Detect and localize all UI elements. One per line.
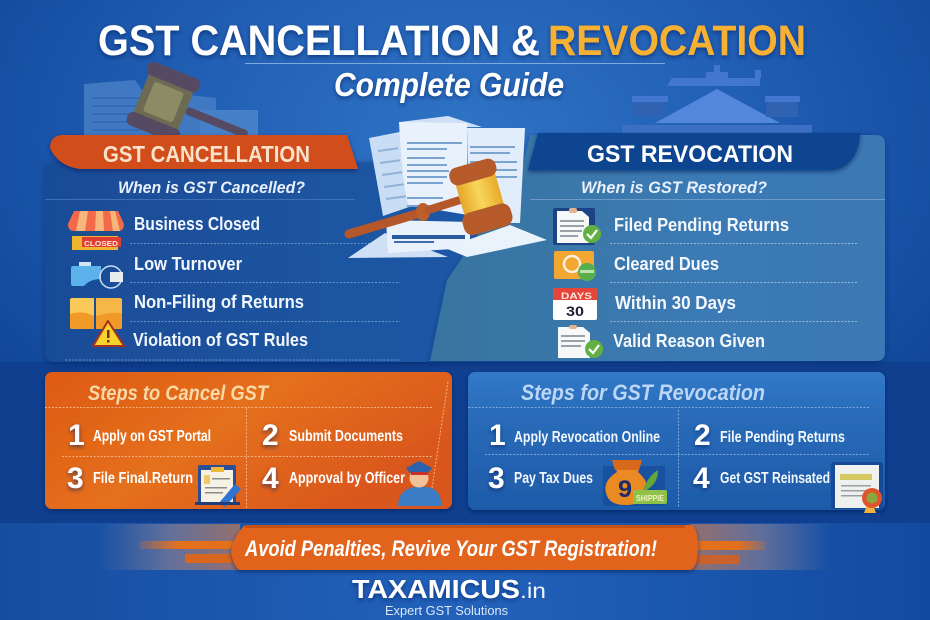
icon: calendar 30 days — [553, 288, 597, 320]
step 4 — [693, 462, 830, 495]
icon: filed returns — [553, 208, 601, 245]
title — [98, 17, 806, 65]
faded documents and gavel — [84, 60, 260, 167]
icon: money bag: 9 — [618, 476, 632, 503]
row: within 30 days: Within 30 Days — [615, 293, 736, 313]
banner: call to action: Avoid Penalties, Revive Your GST Registration! — [244, 536, 657, 561]
ribbon: GST revocation: GST REVOCATION — [587, 141, 793, 168]
step 3 — [488, 462, 593, 495]
icon: clipboard and pen — [195, 465, 241, 507]
step 1: 1 — [489, 419, 506, 452]
panel: GST cancellation — [45, 135, 530, 362]
logo: Taxamicus: .in — [520, 580, 546, 603]
logo: Taxamicus: TAXAMICUS — [352, 574, 520, 604]
icon: officer — [398, 461, 441, 506]
row: non-filing: Non-Filing of Returns — [134, 292, 304, 312]
ribbon: GST revocation — [528, 133, 860, 170]
row: filed returns: Filed Pending Returns — [614, 215, 789, 235]
icon: calendar 30 days: DAYS — [561, 291, 592, 301]
heading: steps to cancel: Steps to Cancel GST — [88, 382, 270, 405]
step 2: 2 — [262, 419, 279, 452]
icon: money bag — [603, 460, 667, 506]
row: violation: Violation of GST Rules — [133, 330, 308, 350]
step 4 — [262, 462, 405, 495]
ribbon: GST cancellation: GST CANCELLATION — [103, 141, 310, 167]
title: & — [511, 17, 540, 65]
step 2: Submit Documents — [289, 428, 403, 445]
icon: valid reason document — [558, 325, 603, 358]
step 1 — [489, 419, 660, 452]
step 2: 2 — [694, 419, 711, 452]
banner: call to action — [100, 524, 830, 570]
icon: closed shop — [68, 211, 124, 250]
icon: cleared dues — [554, 251, 596, 281]
step 1: 1 — [68, 419, 85, 452]
step 3: Pay Tax Dues — [514, 470, 593, 487]
logo: Taxamicus — [352, 574, 546, 618]
step 4: Approval by Officer — [289, 470, 405, 487]
step 3: 3 — [67, 462, 84, 495]
step 1: Apply on GST Portal — [93, 428, 211, 445]
illustration: gavel and documents — [348, 116, 547, 258]
icon: open folder with warning — [70, 298, 124, 346]
step 2 — [262, 419, 403, 452]
step 2 — [694, 419, 845, 452]
icon: money bag: SHIPPIE — [636, 494, 665, 503]
step 1: Apply Revocation Online — [514, 429, 660, 446]
step 4: 4 — [262, 462, 279, 495]
step 4: Get GST Reinsated — [720, 470, 830, 487]
step 3: File Final.Return — [93, 470, 193, 487]
heading: when restored: When is GST Restored? — [581, 178, 768, 197]
panel: steps to cancel — [45, 372, 452, 509]
heading: steps for revocation: Steps for GST Revocation — [521, 380, 765, 405]
step 3: 3 — [488, 462, 505, 495]
icon: low turnover — [71, 262, 123, 288]
step 1 — [68, 419, 211, 452]
ribbon: GST cancellation — [50, 135, 358, 169]
icon: calendar 30 days: 30 — [566, 303, 584, 319]
row: low turnover: Low Turnover — [134, 254, 242, 274]
row: cleared dues: Cleared Dues — [614, 254, 719, 274]
panel: steps for revocation — [468, 372, 885, 513]
title: REVOCATION — [548, 17, 806, 65]
banner streaks — [100, 524, 830, 570]
row: valid reason: Valid Reason Given — [613, 331, 765, 351]
panel: GST revocation — [430, 133, 885, 361]
step 3 — [67, 462, 193, 495]
title: GST CANCELLATION — [98, 17, 500, 65]
icon: certificate — [831, 462, 883, 513]
heading: when cancelled: When is GST Cancelled? — [118, 178, 306, 197]
faded government building — [622, 65, 812, 133]
step 4: 4 — [693, 462, 710, 495]
subtitle: Complete Guide — [334, 66, 564, 103]
tagline: Expert GST Solutions — [385, 603, 508, 618]
icon: closed shop: CLOSED — [84, 239, 119, 248]
row: business closed: Business Closed — [134, 214, 260, 234]
step 2: File Pending Returns — [720, 429, 845, 446]
